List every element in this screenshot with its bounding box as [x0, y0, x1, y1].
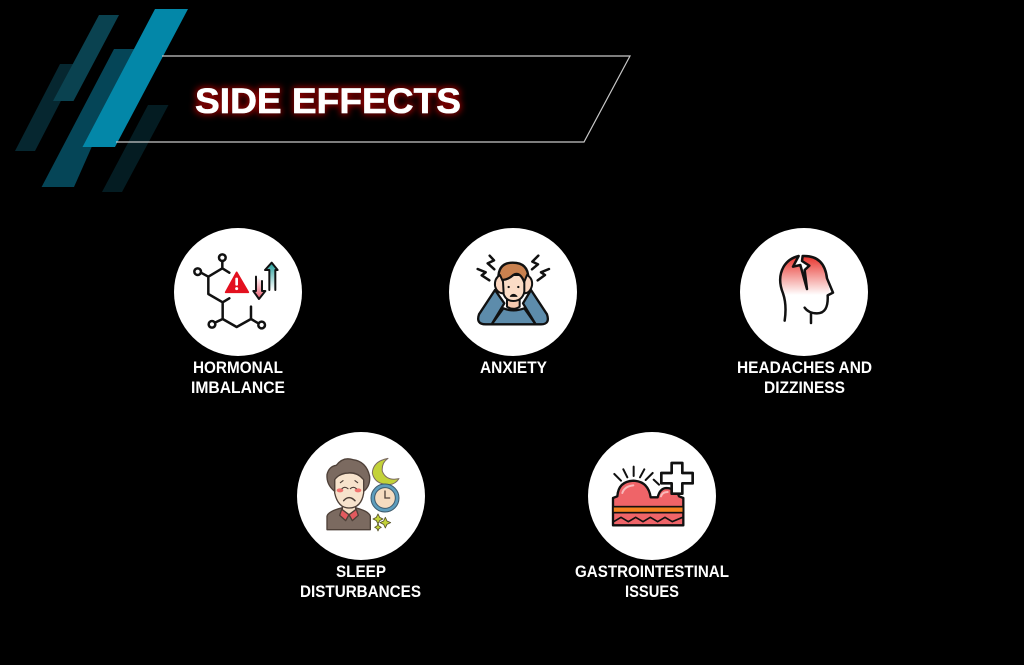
decorative slanted bars: [15, 9, 188, 192]
item: gastrointestinal issues: ISSUES: [625, 583, 679, 601]
label: HEADACHES AND: [737, 359, 872, 377]
label: SLEEP: [336, 563, 386, 581]
item: hormonal imbalance: [174, 228, 302, 397]
title: SIDE EFFECTS: [195, 81, 461, 121]
item: sleep disturbances: DISTURBANCES: [300, 583, 421, 601]
item: headaches and dizziness: DIZZINESS: [764, 379, 845, 397]
item: hormonal imbalance: IMBALANCE: [191, 379, 285, 397]
icon: stomach lining with medical cross: [613, 463, 693, 525]
icon: person holding head: [478, 256, 549, 324]
icon: head with lightning crack: [780, 256, 833, 323]
banner frame: [116, 56, 630, 142]
icon: molecule with warning and arrows: [194, 254, 278, 328]
label: GASTROINTESTINAL: [575, 563, 729, 581]
item: gastrointestinal issues: [575, 432, 729, 601]
circle: [297, 432, 425, 560]
icon: tired person with moon and clock: [327, 458, 399, 531]
item: sleep disturbances: [297, 432, 425, 601]
item: headaches and dizziness: [737, 228, 872, 397]
label: HORMONAL: [193, 359, 283, 377]
label: ANXIETY: [480, 359, 547, 377]
item: anxiety: [449, 228, 577, 377]
circle: [449, 228, 577, 356]
circle: [174, 228, 302, 356]
circle: [588, 432, 716, 560]
circle: [740, 228, 868, 356]
title banner: [116, 56, 630, 142]
